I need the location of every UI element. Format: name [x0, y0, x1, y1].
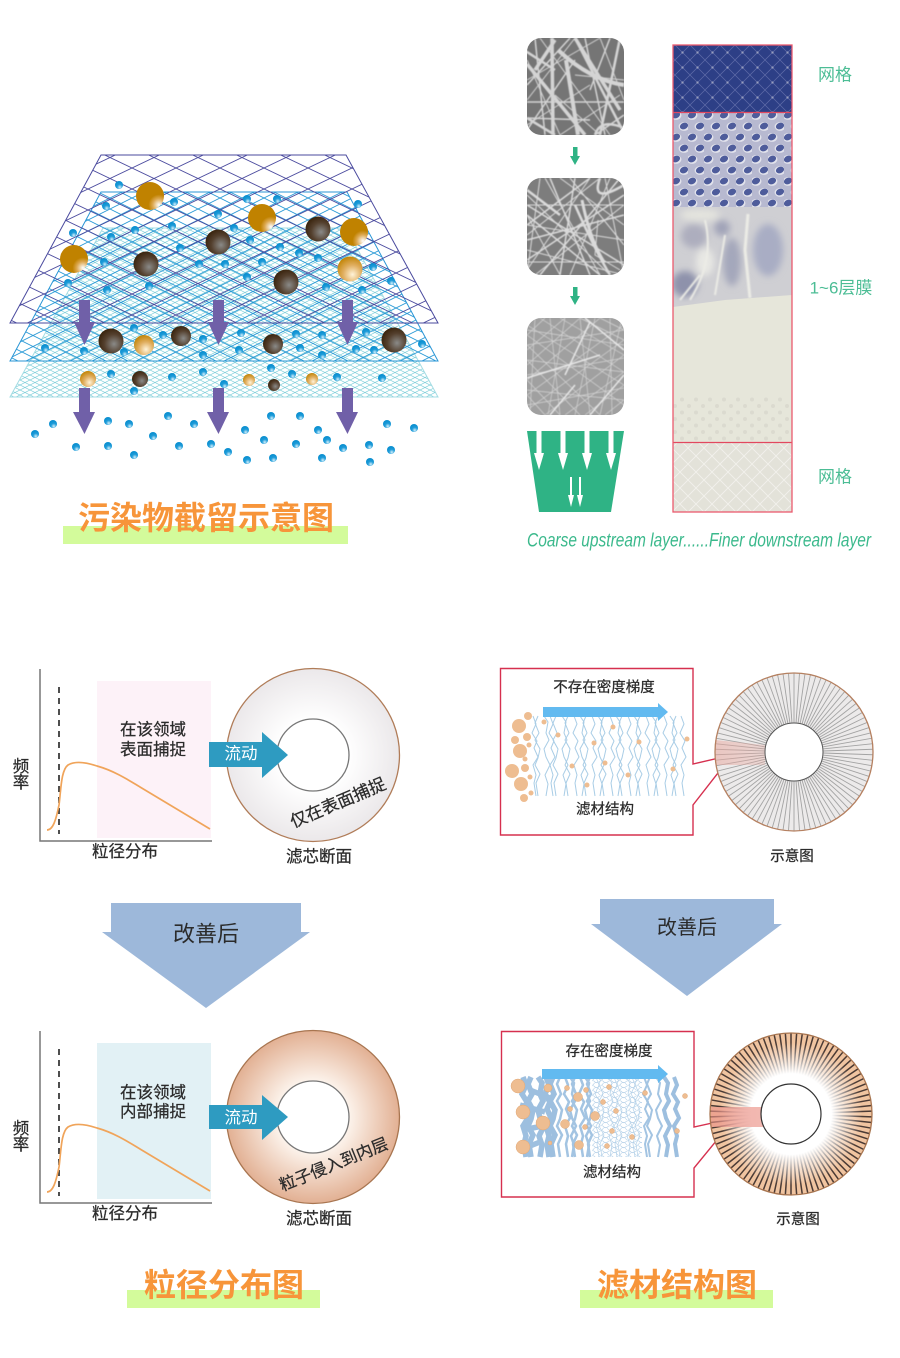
label: membrane layers: 1~6层膜: [810, 278, 872, 298]
arrow: improved right: [591, 899, 782, 996]
radial filter diagram after: [701, 1023, 881, 1228]
photo: coarse fibres: [524, 38, 625, 135]
y axis label: 率: [13, 773, 29, 792]
y axis label: [13, 1119, 29, 1154]
arrows: white flow: [534, 431, 616, 507]
funnel: coarse to fine: [527, 431, 624, 512]
arrow: down: [570, 287, 580, 305]
region label: 在该领域: [120, 1083, 186, 1102]
y axis label: 频: [13, 757, 29, 776]
heading: contaminant retention: 污染物截留示意图: [78, 500, 334, 536]
arrow: down: [570, 147, 580, 165]
medium fibres: [557, 1077, 592, 1157]
mesh layer: top coarse: [10, 155, 438, 323]
flow arrow: 流动: [224, 744, 258, 763]
box heading: 存在密度梯度: [566, 1043, 652, 1060]
filtered fine particles: [41, 181, 426, 395]
photo: fine fibres: [527, 318, 624, 415]
x axis label: 粒径分布: [92, 842, 158, 861]
chart: particle size distribution before: [13, 669, 212, 861]
arrow: improved left: 改善后: [173, 922, 239, 946]
label: mesh bottom: 网格: [818, 468, 852, 486]
filter cross-section before: [209, 668, 400, 866]
y axis label: 频: [13, 1119, 29, 1138]
radial filter diagram before: [714, 672, 874, 862]
region label: 表面捕捉: [120, 740, 186, 759]
x axis label: 粒径分布: [92, 1204, 158, 1223]
mesh layer: bottom fine: [10, 228, 438, 397]
box: media structure with gradient: [502, 1032, 735, 1197]
contaminant balls: [60, 182, 406, 391]
region label: 在该领域: [120, 720, 186, 739]
flow arrow: 流动: [224, 1108, 258, 1127]
rotated label: 仅在表面捕捉: [287, 774, 389, 832]
photo: medium fibres: [527, 178, 624, 275]
y axis label: 率: [13, 1135, 29, 1154]
flow arrow: [209, 732, 288, 778]
label: mesh top: 网格: [818, 66, 852, 84]
coarse fibres right: [664, 1077, 679, 1157]
particles: [511, 1079, 688, 1154]
arrow: improved right: 改善后: [657, 916, 717, 939]
mesh layer: middle: [10, 192, 438, 361]
flow arrow: [209, 1095, 288, 1140]
heading: particle size distribution: 粒径分布图: [144, 1267, 304, 1303]
fine fibres: [592, 1077, 642, 1157]
caption: 滤芯断面: [286, 1209, 352, 1228]
filter cross-section after: [209, 1030, 400, 1228]
box caption: 滤材结构: [576, 801, 634, 818]
arrows: flow through layers: [73, 300, 358, 434]
y axis label: [13, 757, 29, 792]
coarse fibres left: [520, 1077, 555, 1157]
box caption: 滤材结构: [583, 1164, 641, 1181]
fine vertical fibres: [595, 1077, 640, 1157]
arrow: improved left: [102, 903, 310, 1008]
box heading: 不存在密度梯度: [553, 679, 655, 696]
heading: media structure: 滤材结构图: [597, 1267, 757, 1303]
caption: 示意图: [770, 847, 814, 865]
fibres: [532, 716, 686, 796]
rotated label: 粒子侵入到内层: [277, 1134, 391, 1195]
particles passing through: [31, 412, 418, 466]
diagram: contaminant retention mesh layers: [10, 155, 438, 466]
caption: 滤芯断面: [286, 847, 352, 866]
gradient arrow: [542, 1065, 668, 1083]
region label: [120, 720, 186, 759]
chart: particle size distribution after: [13, 1031, 212, 1223]
region label: [120, 1083, 186, 1121]
box: media structure no gradient: [500, 668, 732, 835]
photo strip: filter layers: [672, 45, 792, 512]
medium fibres right: [643, 1077, 662, 1157]
caption: 示意图: [776, 1210, 820, 1228]
particles: [505, 712, 690, 802]
gradient arrow: [543, 703, 668, 721]
region label: 内部捕捉: [120, 1102, 186, 1121]
